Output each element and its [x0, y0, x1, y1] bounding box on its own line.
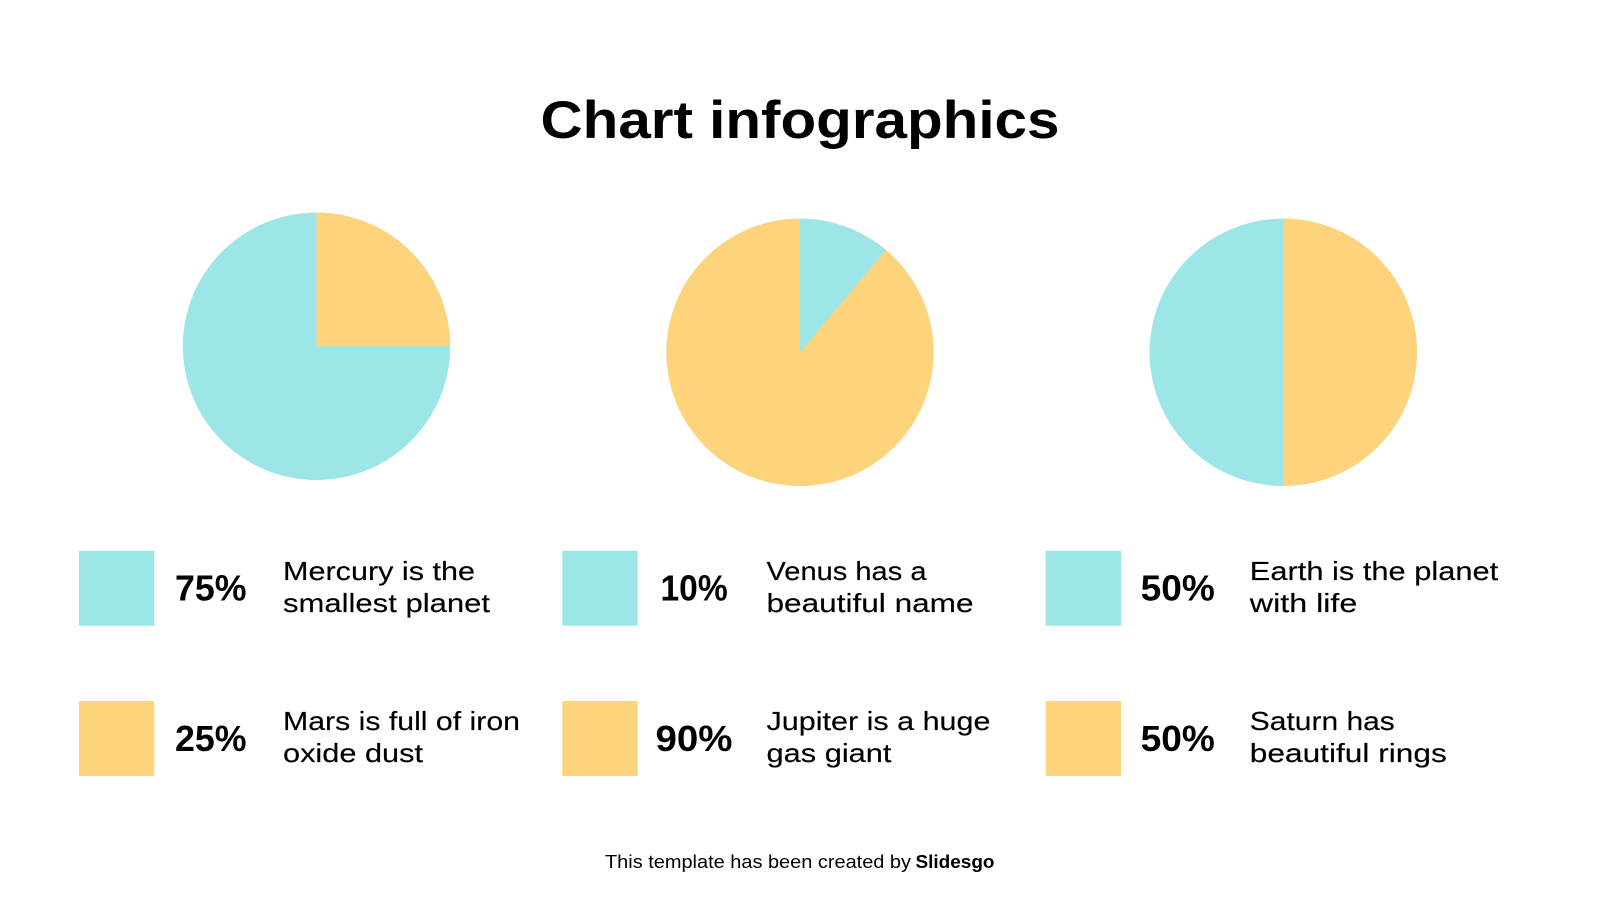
- footer credit: Slidesgo: [916, 852, 995, 872]
- Mars description: oxide dust: [283, 738, 424, 768]
- Mars colour swatch: [79, 701, 154, 776]
- Jupiter percentage: 90%: [656, 718, 732, 759]
- Earth percentage: 50%: [1141, 568, 1215, 609]
- Mercury colour swatch: [79, 551, 154, 626]
- Saturn colour swatch: [1046, 701, 1121, 776]
- panel: Earth legend: [1046, 551, 1499, 626]
- Mercury description: smallest planet: [283, 588, 491, 618]
- title: Chart infographics: [540, 91, 1060, 150]
- Mercury description: [283, 556, 491, 618]
- panel: Mercury legend: [79, 551, 491, 626]
- pie chart: Mercury and Mars: [183, 213, 450, 480]
- Earth colour swatch: [1046, 551, 1121, 626]
- panel: Venus legend: [562, 551, 974, 626]
- Saturn description: beautiful rings: [1250, 738, 1447, 768]
- Venus description: [766, 556, 974, 618]
- Saturn description: [1250, 706, 1447, 768]
- Earth description: [1249, 556, 1499, 618]
- Mercury percentage: 75%: [175, 568, 246, 609]
- Jupiter description: [766, 706, 990, 768]
- Venus description: Venus has a: [766, 556, 927, 586]
- Saturn percentage: 50%: [1141, 718, 1215, 759]
- pie chart: Venus and Jupiter: [666, 219, 934, 486]
- panel: Saturn legend: [1046, 701, 1447, 776]
- Earth description: Earth is the planet: [1250, 556, 1499, 586]
- panel: Jupiter legend: [562, 701, 990, 776]
- Mars description: Mars is full of iron: [283, 706, 520, 736]
- panel: Mars legend: [79, 701, 520, 776]
- Venus description: beautiful name: [766, 588, 974, 618]
- Jupiter description: gas giant: [766, 738, 892, 768]
- Jupiter description: Jupiter is a huge: [766, 706, 990, 736]
- Mars percentage: 25%: [175, 718, 246, 759]
- Venus percentage: 10%: [660, 568, 728, 609]
- footer credit: This template has been created by: [605, 852, 911, 872]
- Earth description: with life: [1249, 588, 1357, 618]
- Venus colour swatch: [562, 551, 638, 626]
- Jupiter colour swatch: [562, 701, 638, 776]
- Mars description: [283, 706, 520, 768]
- Mercury description: Mercury is the: [283, 556, 475, 586]
- pie chart: Earth and Saturn: [1150, 219, 1417, 486]
- Saturn description: Saturn has: [1250, 706, 1395, 736]
